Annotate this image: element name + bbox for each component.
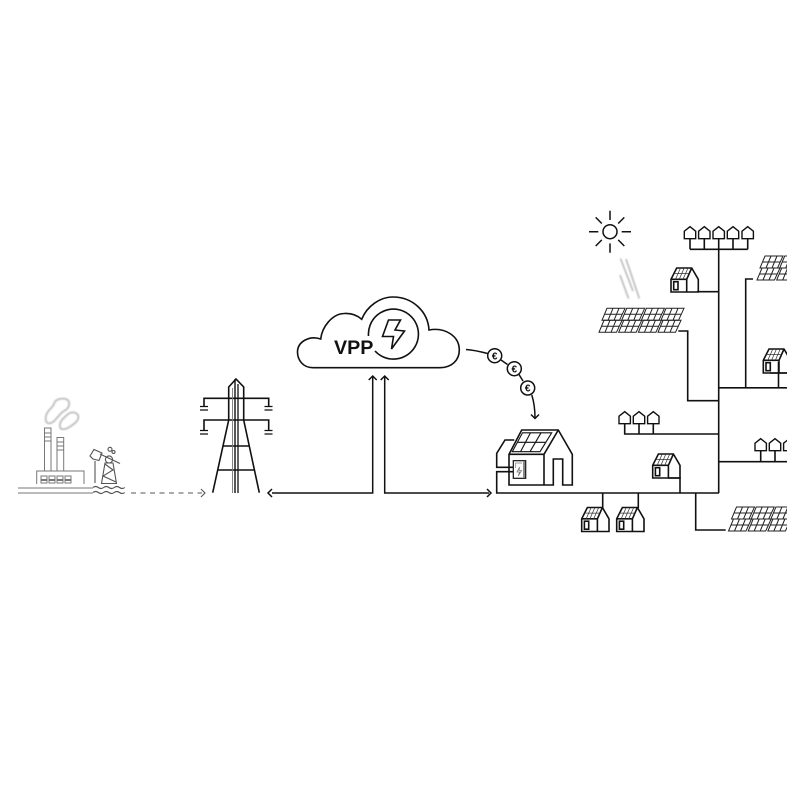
distribution network lines <box>603 238 790 530</box>
solar field: bottom right <box>728 507 794 531</box>
grid lines with arrows <box>268 376 491 497</box>
lightning bolt <box>382 320 404 349</box>
battery <box>513 461 526 478</box>
oil pump <box>90 447 125 494</box>
dashed arrow: fossil supply to grid <box>131 489 205 497</box>
solar field: left <box>599 308 684 332</box>
VPP cloud <box>298 297 459 368</box>
top cluster of small houses <box>684 227 753 239</box>
factory building <box>37 471 84 484</box>
euro payment flow: € <box>492 351 498 362</box>
sun <box>589 211 631 253</box>
house wiring <box>497 440 719 493</box>
euro payment flow <box>466 349 539 418</box>
VPP label: VPP <box>334 337 373 359</box>
euro payment flow: € <box>512 364 518 375</box>
sun rays <box>620 258 639 298</box>
solar field: top right <box>756 256 787 280</box>
ground lines <box>18 488 93 493</box>
factory <box>18 399 93 493</box>
cloud outline <box>298 297 459 368</box>
right cluster of small houses <box>755 439 795 451</box>
prosumer house with solar roof and battery <box>497 430 719 493</box>
transmission tower <box>200 379 272 493</box>
euro payment flow: € <box>525 384 531 395</box>
solar-roof houses <box>582 268 791 532</box>
lightning circle <box>368 309 418 359</box>
chimneys <box>44 428 64 471</box>
middle cluster of small houses <box>619 412 659 424</box>
diagram: virtual power plant network <box>18 210 787 532</box>
chimney smoke <box>46 399 78 429</box>
